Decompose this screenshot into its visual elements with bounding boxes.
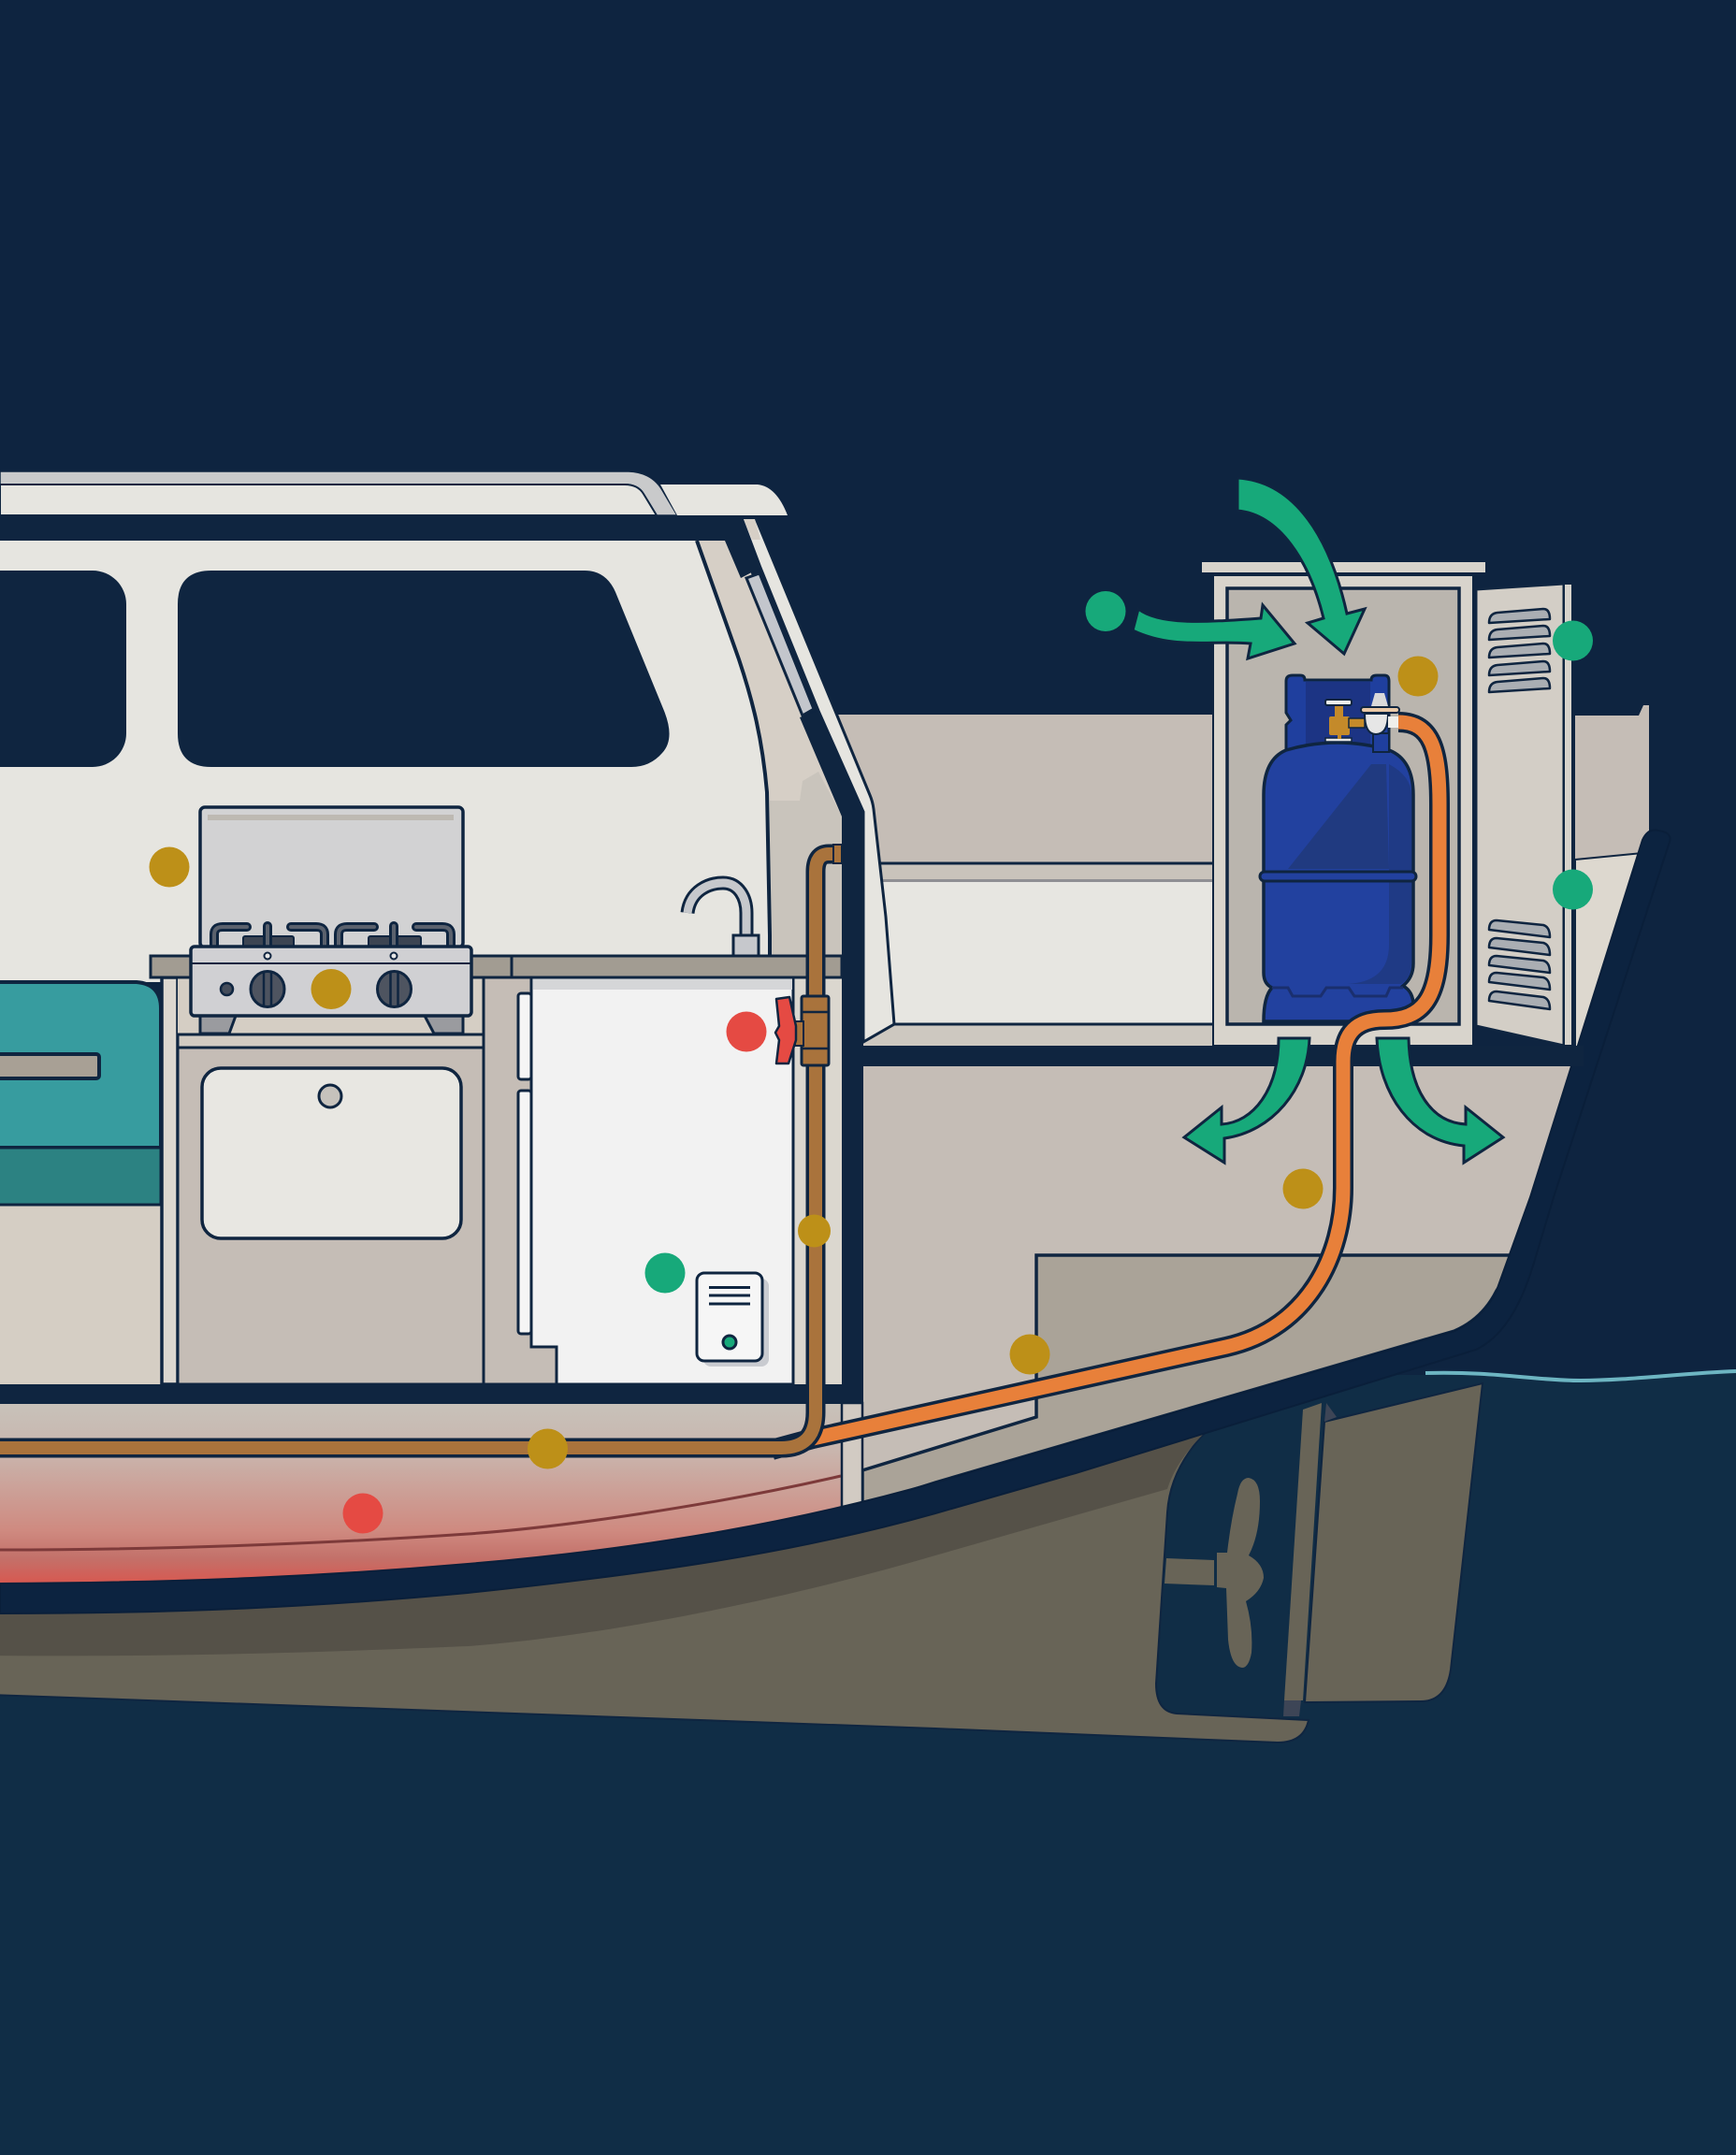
fridge top shadow <box>533 978 792 990</box>
pillar lower shade <box>770 772 842 977</box>
water <box>0 1371 1736 2155</box>
oven knob <box>319 1085 341 1107</box>
window rail <box>746 573 814 716</box>
deck band <box>863 1046 1584 1066</box>
airflow arrow: down left <box>1184 1038 1309 1163</box>
body shade right <box>1347 764 1411 984</box>
orange gas hose <box>772 722 1439 1450</box>
lower pillar navy <box>800 711 863 1403</box>
green markers <box>645 591 1593 1293</box>
burner caps <box>243 936 294 947</box>
cream wall <box>0 541 770 982</box>
backsplash <box>200 807 463 947</box>
oven door <box>202 1068 461 1238</box>
door hinge strip <box>1564 584 1572 1046</box>
airflow arrow: down right <box>1377 1038 1503 1163</box>
cabinet shelf space <box>178 977 484 1034</box>
locker door <box>1476 584 1564 1046</box>
hull strut <box>842 1403 862 1513</box>
collar web <box>1306 682 1370 752</box>
pillar strip <box>162 977 178 1384</box>
lower compartment <box>862 1255 1520 1506</box>
gas detector <box>697 1273 762 1361</box>
cabin wall <box>0 471 894 1403</box>
cylinder body <box>1264 743 1413 1021</box>
seat cushion <box>0 982 161 1148</box>
floor band <box>0 1384 863 1404</box>
post wedge <box>1324 1403 1337 1422</box>
gas locker <box>1202 562 1572 1046</box>
roof overhang <box>660 485 788 515</box>
roof rail inner <box>0 485 657 515</box>
hull interior <box>0 1057 1581 1584</box>
cabinet body <box>178 1048 484 1384</box>
hull shadow band <box>0 1431 1207 1656</box>
prop shaft <box>1165 1558 1214 1585</box>
aft deck structures <box>832 705 1649 1048</box>
rear wall <box>832 715 1225 864</box>
rear bench band <box>870 863 1225 881</box>
roof navy band <box>0 515 760 578</box>
bench front <box>870 881 1225 1024</box>
stern wall right <box>1575 705 1649 860</box>
locker interior <box>1227 588 1459 1024</box>
cabinet shelf <box>178 1034 484 1048</box>
post foot <box>1283 1700 1301 1716</box>
fridge hinge upper <box>518 993 531 1079</box>
prop blades and hub <box>1217 1478 1264 1668</box>
collar <box>1286 675 1389 752</box>
red markers <box>342 1012 767 1534</box>
gas cylinder <box>1260 675 1416 1021</box>
propeller <box>1165 1478 1264 1668</box>
detector shadow <box>703 1279 769 1367</box>
amber markers <box>150 657 1439 1468</box>
seat base <box>0 1205 161 1384</box>
knobs <box>251 971 284 1006</box>
faucet <box>687 883 759 956</box>
cylinder band <box>1260 872 1416 881</box>
right gap <box>794 977 842 1384</box>
table bar <box>0 1054 99 1078</box>
hull interior upper <box>863 1057 1581 1506</box>
seat lower cushion <box>0 1148 161 1205</box>
waterline <box>1425 1371 1736 1381</box>
cabin roof rail <box>0 471 677 515</box>
hull navy outline <box>0 830 1671 1613</box>
rudder <box>1283 1383 1483 1716</box>
status markers <box>150 591 1593 1534</box>
pillar backing <box>695 541 842 956</box>
indicators <box>264 952 271 960</box>
valve fitting <box>802 996 829 1065</box>
rudder post <box>1284 1403 1322 1700</box>
regulator <box>1361 693 1400 752</box>
red handle <box>775 997 796 1063</box>
stern inner panel <box>1575 853 1642 1048</box>
foot ring line <box>1272 988 1403 996</box>
airflow arrow: top into locker <box>1237 478 1365 654</box>
window main <box>178 571 670 767</box>
airflow arrow: left into locker <box>1133 605 1295 658</box>
valve <box>1325 700 1365 742</box>
vents top <box>1489 609 1550 692</box>
side column and fridge <box>484 977 842 1384</box>
copper pipe <box>0 845 842 1448</box>
countertop <box>151 956 842 977</box>
stove body <box>191 947 471 1016</box>
fridge body <box>531 977 793 1384</box>
valve stem <box>795 1021 803 1046</box>
lower hull exterior <box>0 1431 1309 1743</box>
lower wall <box>162 977 842 1385</box>
grates <box>214 926 451 947</box>
stove cabinet <box>178 977 484 1384</box>
outer shell strip <box>742 518 894 1042</box>
bilge liquid line <box>0 1476 841 1550</box>
fridge hinge lower <box>518 1091 531 1334</box>
locker top cap <box>1202 562 1485 572</box>
stove legs <box>200 1016 463 1034</box>
body shade top <box>1288 764 1389 869</box>
lower deck band <box>863 1024 1219 1048</box>
vents bottom <box>1489 920 1550 1009</box>
stove <box>191 807 471 1034</box>
bilge gradient <box>0 1403 842 1584</box>
column <box>484 977 793 1384</box>
shell beige tip <box>744 519 760 540</box>
shutoff valve <box>775 996 829 1065</box>
window left <box>0 571 126 767</box>
locker frame <box>1213 575 1473 1046</box>
seat and lower cabin left <box>0 977 842 1385</box>
cream wall edge <box>697 541 770 958</box>
